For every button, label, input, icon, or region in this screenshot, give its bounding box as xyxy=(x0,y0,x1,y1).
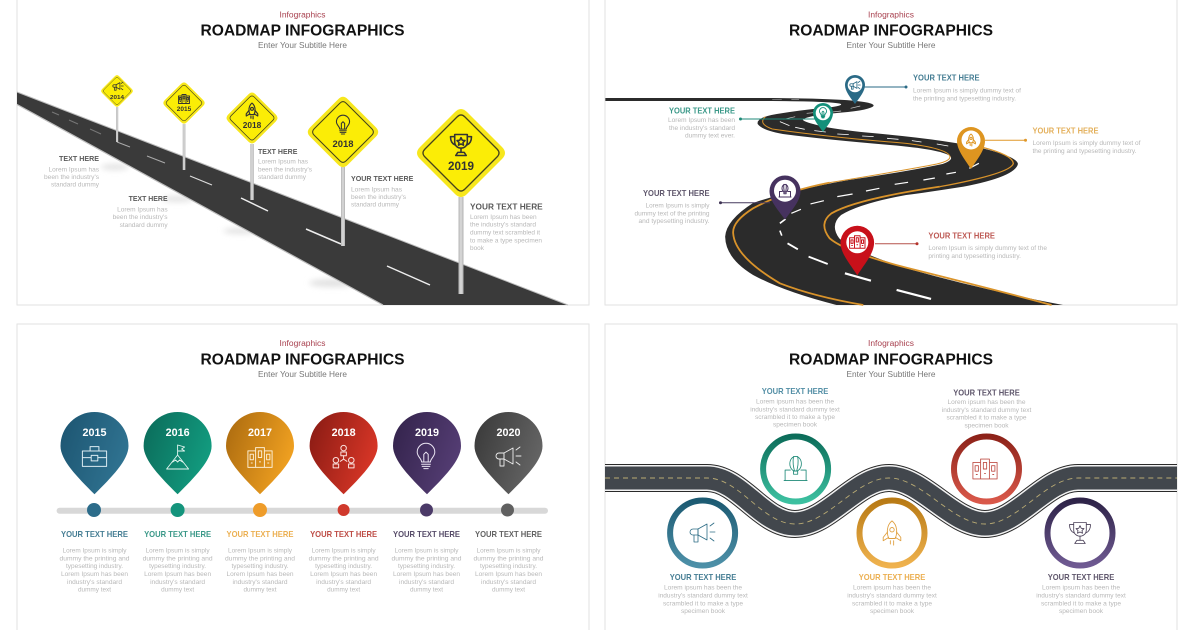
text block megaphone: YOUR TEXT HERE xyxy=(670,572,737,582)
text block balloon xyxy=(750,386,840,428)
column text 2018: Lorem Ipsum has been xyxy=(310,571,377,578)
pin 4 purple xyxy=(719,176,800,220)
ring milestone rocket xyxy=(860,500,924,566)
timeline track xyxy=(57,508,548,514)
text block 2014: standard dummy xyxy=(51,182,100,189)
panel 3 kicker: Infographics xyxy=(280,339,326,348)
text block 2018 large xyxy=(351,174,413,209)
text block 2019 xyxy=(470,201,543,252)
text block 2014: TEXT HERE xyxy=(59,156,99,163)
column text 2015: dummy the printing and xyxy=(60,556,130,563)
ring milestone megaphone xyxy=(670,500,735,566)
marker 2017: 2017 xyxy=(248,427,272,439)
text block 2018 small: Lorem Ipsum has xyxy=(258,159,309,166)
marker 2017 xyxy=(226,412,294,517)
text block 2014 xyxy=(44,156,100,189)
text block pin 4 xyxy=(634,188,710,225)
column text 2016: industry's standard xyxy=(150,579,205,586)
column text 2018: typesetting industry. xyxy=(315,563,372,570)
column text 2020: dummy the printing and xyxy=(474,556,544,563)
wavy road xyxy=(605,478,1177,524)
sign 2018 small xyxy=(226,92,278,200)
column text 2017: YOUR TEXT HERE xyxy=(226,529,294,539)
text block buildings: YOUR TEXT HERE xyxy=(953,387,1020,397)
ring milestone buildings xyxy=(954,436,1019,502)
panel: wavy road with ring milestones xyxy=(605,324,1177,630)
text block buildings: scrambled it to make a type xyxy=(946,415,1027,422)
panel 2 kicker: Infographics xyxy=(868,11,914,20)
text block balloon: industry's standard dummy text xyxy=(750,406,840,413)
text block megaphone xyxy=(658,572,748,615)
panel 2 subtitle: Enter Your Subtitle Here xyxy=(846,40,936,50)
sign 2019 xyxy=(417,109,505,294)
panel 3 background xyxy=(17,324,589,630)
column text 2019: Lorem Ipsum is simply xyxy=(394,548,459,555)
sign 2015 xyxy=(163,82,205,170)
sign 2019: 2019 xyxy=(448,161,474,173)
text block 2019: YOUR TEXT HERE xyxy=(470,201,543,211)
ring milestone balloon xyxy=(763,436,828,502)
text block pin 2: dummy text ever. xyxy=(685,133,735,140)
column text 2018: Lorem Ipsum is simply xyxy=(312,548,376,555)
text block rocket: scrambled it to make a type xyxy=(852,600,932,607)
text block 2015: Lorem Ipsum has xyxy=(117,206,168,213)
text block pin 1: the printing and typesetting industry. xyxy=(913,95,1016,102)
text block 2014: Lorem Ipsum has xyxy=(48,166,100,173)
column text 2016 xyxy=(143,529,213,594)
text block balloon: scrambled it to make a type xyxy=(755,414,835,421)
text block pin 4: dummy text of the printing xyxy=(634,210,710,217)
marker 2016 xyxy=(144,412,212,517)
panel 1 kicker: Infographics xyxy=(280,11,326,20)
marker 2015 xyxy=(60,412,128,517)
panel: winding road with map pins xyxy=(605,0,1177,305)
text block 2018 small: been the industry's xyxy=(258,167,313,174)
text block rocket: YOUR TEXT HERE xyxy=(859,572,926,582)
column text 2020: dummy text xyxy=(492,587,525,594)
text block 2019: Lorem Ipsum has been xyxy=(470,214,537,221)
sign 2015: 2015 xyxy=(177,107,192,113)
column text 2020: Lorem Ipsum has been xyxy=(475,571,542,578)
text block pin 1: YOUR TEXT HERE xyxy=(913,73,980,83)
column text 2016: dummy the printing and xyxy=(143,556,213,563)
text block trophy: scrambled it to make a type xyxy=(1041,600,1121,607)
column text 2019: Lorem Ipsum has been xyxy=(393,571,460,578)
text block 2015: standard dummy xyxy=(120,222,168,229)
text block rocket: specimen book xyxy=(870,608,915,615)
marker 2020: 2020 xyxy=(496,427,520,439)
sign 2014 xyxy=(101,75,133,142)
pin 5 red xyxy=(840,226,918,275)
marker 2015: 2015 xyxy=(82,427,106,439)
column text 2017: Lorem Ipsum is simply xyxy=(228,548,293,555)
diagonal road xyxy=(17,92,568,305)
sign 2018 large xyxy=(308,97,378,246)
text block pin 4: Lorem Ipsum is simply xyxy=(646,203,710,210)
text block balloon: Lorem ipsum has been the xyxy=(756,398,834,405)
column text 2020: Lorem Ipsum is simply xyxy=(476,548,541,555)
text block pin 5 xyxy=(928,230,1047,260)
column text 2016: YOUR TEXT HERE xyxy=(144,529,211,539)
text block 2015: been the industry's xyxy=(113,214,168,221)
text block 2015: TEXT HERE xyxy=(129,196,168,203)
marker 2019 xyxy=(393,412,461,516)
text block balloon: specimen book xyxy=(773,421,818,428)
panel 3 title: ROADMAP INFOGRAPHICS xyxy=(200,351,404,368)
column text 2016: Lorem Ipsum has been xyxy=(144,571,211,578)
text block rocket xyxy=(847,572,937,615)
text block trophy: industry's standard dummy text xyxy=(1036,593,1126,600)
text block megaphone: specimen book xyxy=(681,608,726,615)
text block trophy: Lorem ipsum has been the xyxy=(1042,585,1120,592)
text block buildings xyxy=(942,387,1031,429)
text block pin 3 xyxy=(1032,125,1141,155)
sign 2014: 2014 xyxy=(110,95,125,101)
text block pin 2: YOUR TEXT HERE xyxy=(669,105,735,115)
column text 2017: Lorem Ipsum has been xyxy=(226,571,294,578)
text block rocket: industry's standard dummy text xyxy=(847,593,937,600)
column text 2019: industry's standard xyxy=(399,579,454,586)
panel 4 background xyxy=(605,324,1177,630)
text block trophy xyxy=(1036,572,1126,615)
column text 2015: dummy text xyxy=(78,587,111,594)
text block buildings: Lorem ipsum has been the xyxy=(948,399,1026,406)
text block 2019: the industry's standard xyxy=(470,222,536,229)
pin 3 orange xyxy=(957,127,1027,169)
text block buildings: specimen book xyxy=(964,422,1009,429)
text block megaphone: scrambled it to make a type xyxy=(663,600,743,607)
text block 2018 large: standard dummy xyxy=(351,202,400,209)
column text 2020 xyxy=(474,529,544,594)
panel 1 background xyxy=(17,0,589,305)
column text 2017: industry's standard xyxy=(232,579,288,586)
panel: straight road with road signs xyxy=(17,0,589,305)
column text 2018 xyxy=(309,529,379,594)
text block 2019: dummy text scrambled it xyxy=(470,229,540,236)
text block 2019: book xyxy=(470,245,485,252)
panel 4 subtitle: Enter Your Subtitle Here xyxy=(846,369,936,379)
text block 2014: been the industry's xyxy=(44,174,100,181)
marker 2020 xyxy=(474,412,542,516)
winding road xyxy=(605,98,1063,305)
column text 2019: dummy text xyxy=(410,587,443,594)
text block 2019: to make a type specimen xyxy=(470,237,542,244)
pin 1 teal blue xyxy=(845,75,908,104)
text block megaphone: industry's standard dummy text xyxy=(658,593,748,600)
column text 2015: industry's standard xyxy=(67,579,122,586)
text block pin 4: YOUR TEXT HERE xyxy=(643,188,710,198)
panel 3 subtitle: Enter Your Subtitle Here xyxy=(258,369,347,379)
column text 2015: Lorem Ipsum has been xyxy=(61,571,128,578)
column text 2017 xyxy=(225,529,295,594)
text block pin 2: Lorem Ipsum has been xyxy=(668,117,735,124)
column text 2018: industry's standard xyxy=(316,579,371,586)
column text 2019: dummy the printing and xyxy=(392,556,462,563)
text block 2018 small xyxy=(258,149,313,181)
column text 2017: typesetting industry. xyxy=(232,563,289,570)
text block trophy: YOUR TEXT HERE xyxy=(1048,572,1115,582)
panel 1 title: ROADMAP INFOGRAPHICS xyxy=(200,23,404,40)
text block 2018 large: been the industry's xyxy=(351,194,407,201)
text block megaphone: Lorem ipsum has been the xyxy=(664,585,742,592)
column text 2018: dummy text xyxy=(327,587,360,594)
marker 2016: 2016 xyxy=(166,427,190,439)
text block 2018 small: standard dummy xyxy=(258,174,307,181)
text block pin 5: Lorem Ipsum is simply dummy text of the xyxy=(928,245,1047,252)
column text 2015: typesetting industry. xyxy=(66,563,123,570)
column text 2015: Lorem Ipsum is simply xyxy=(62,548,127,555)
sign 2018 large: 2018 xyxy=(332,139,354,150)
text block pin 3: YOUR TEXT HERE xyxy=(1032,125,1099,135)
column text 2019: YOUR TEXT HERE xyxy=(393,529,460,539)
column text 2018: YOUR TEXT HERE xyxy=(310,529,377,539)
marker 2018 xyxy=(310,412,378,516)
column text 2020: industry's standard xyxy=(481,579,536,586)
text block pin 4: and typesetting industry. xyxy=(638,218,710,225)
panel 4 kicker: Infographics xyxy=(868,339,914,348)
column text 2019: typesetting industry. xyxy=(398,563,455,570)
text block pin 2: the industry's standard xyxy=(669,125,735,132)
panel 2 background xyxy=(605,0,1177,305)
column text 2015 xyxy=(60,529,130,594)
text block pin 5: printing and typesetting industry. xyxy=(928,253,1021,260)
sign 2018 small: 2018 xyxy=(243,121,262,130)
text block 2018 large: Lorem Ipsum has xyxy=(351,186,403,193)
column text 2017: dummy text xyxy=(244,587,277,594)
text block 2015 xyxy=(113,196,168,229)
text block pin 5: YOUR TEXT HERE xyxy=(928,230,995,240)
text block pin 2 xyxy=(668,105,735,140)
text block rocket: Lorem ipsum has been the xyxy=(853,585,931,592)
panel 2 title: ROADMAP INFOGRAPHICS xyxy=(789,23,993,40)
text block pin 3: Lorem Ipsum is simply dummy text of xyxy=(1032,140,1141,147)
ring milestone trophy xyxy=(1048,500,1112,566)
text block buildings: industry's standard dummy text xyxy=(942,407,1031,414)
text block 2018 large: YOUR TEXT HERE xyxy=(351,174,413,183)
text block pin 3: the printing and typesetting industry. xyxy=(1032,148,1137,155)
column text 2017: dummy the printing and xyxy=(225,556,295,563)
panel 1 subtitle: Enter Your Subtitle Here xyxy=(258,40,347,50)
sign shadows on ground xyxy=(101,164,357,287)
pin 2 green xyxy=(739,103,833,132)
marker 2018: 2018 xyxy=(332,427,356,439)
column text 2019 xyxy=(392,529,462,594)
marker 2019: 2019 xyxy=(415,427,439,439)
text block pin 1: Lorem Ipsum is simply dummy text of xyxy=(913,88,1021,95)
column text 2020: typesetting industry. xyxy=(480,563,537,570)
column text 2016: dummy text xyxy=(161,587,194,594)
text block pin 1 xyxy=(913,73,1021,102)
column text 2016: typesetting industry. xyxy=(149,563,206,570)
column text 2015: YOUR TEXT HERE xyxy=(61,529,128,539)
panel 4 title: ROADMAP INFOGRAPHICS xyxy=(789,351,993,368)
panel: six drop markers timeline xyxy=(17,324,589,630)
text block trophy: specimen book xyxy=(1059,608,1104,615)
text block balloon: YOUR TEXT HERE xyxy=(762,386,829,396)
column text 2020: YOUR TEXT HERE xyxy=(475,529,542,539)
column text 2016: Lorem Ipsum is simply xyxy=(146,548,210,555)
text block 2018 small: TEXT HERE xyxy=(258,149,298,156)
column text 2018: dummy the printing and xyxy=(309,556,379,563)
